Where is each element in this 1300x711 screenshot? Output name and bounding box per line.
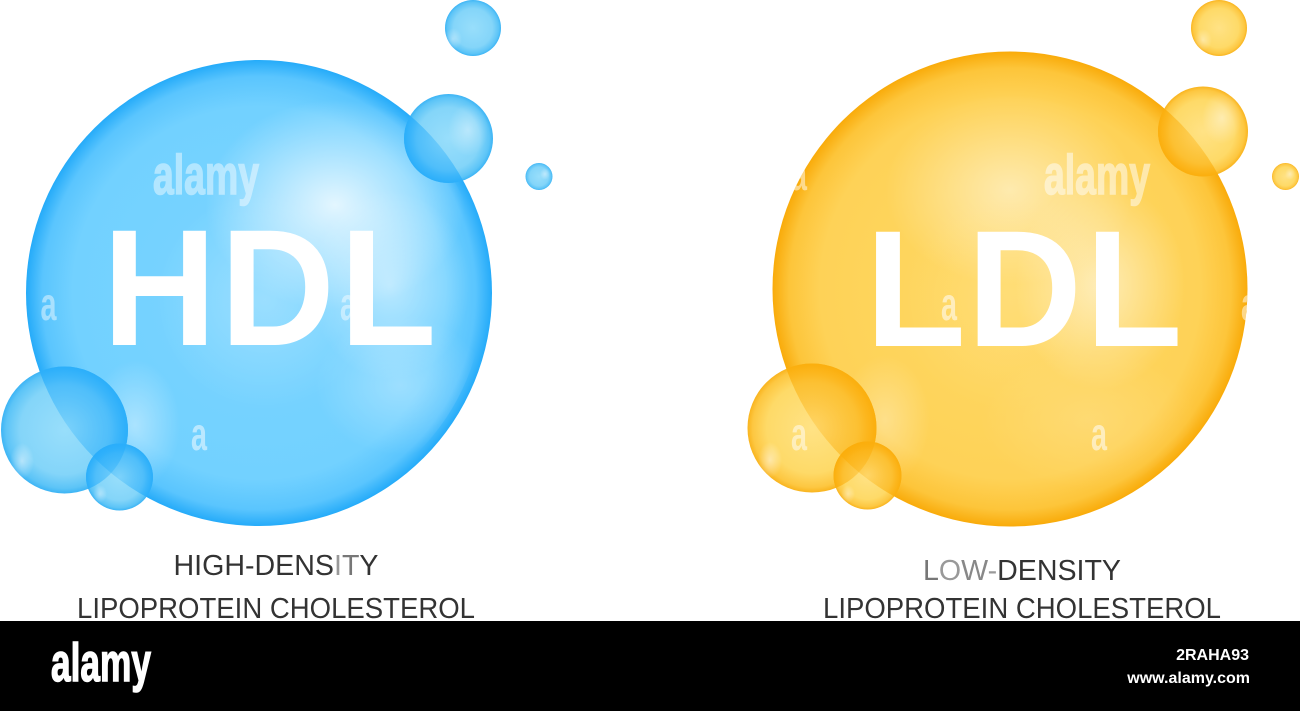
HDL label: D — [220, 196, 335, 381]
icon: blue small bubble lower left — [86, 444, 153, 510]
icon: orange bubble overlapping upper right — [1158, 86, 1248, 176]
watermark: clipped letter a at sphere edges: a — [1241, 278, 1257, 330]
icon: orange bubble lower left — [748, 364, 876, 492]
LDL description: LIPOPROTEIN CHOLESTEROL — [823, 593, 1221, 625]
panel: HDL — [1, 0, 552, 625]
HDL description: HIGH-DENSITY — [174, 550, 378, 582]
LDL label: D — [967, 197, 1082, 382]
icon: large orange LDL sphere — [772, 52, 1248, 526]
watermark: letter a left: a — [941, 278, 957, 330]
LDL label: L — [865, 197, 966, 382]
icon: blue bubble overlapping upper right — [404, 94, 493, 183]
HDL label — [102, 196, 436, 381]
watermark: letter a middle: a — [340, 278, 356, 330]
LDL label — [865, 197, 1182, 382]
watermark: alamy on LDL: alamy — [1044, 143, 1150, 206]
icon: large blue HDL sphere — [26, 60, 492, 526]
HDL description — [77, 550, 475, 625]
footer bar — [0, 621, 1300, 711]
HDL label: L — [340, 196, 436, 381]
footer site address: www.alamy.com — [1126, 670, 1250, 687]
footer logo: alamy: alamy — [51, 633, 151, 693]
HDL description: LIPOPROTEIN CHOLESTEROL — [77, 593, 475, 625]
LDL description: LOW-DENSITY — [923, 555, 1121, 587]
watermark: letter a lower left: a — [791, 408, 807, 460]
watermark: clipped letter a at sphere edges — [791, 148, 1257, 330]
icon: small blue bubble right — [526, 163, 552, 190]
HDL label: H — [102, 196, 216, 381]
watermark: letter a bottom: a — [191, 408, 207, 460]
icon: blue bubble top — [444, 0, 501, 56]
watermark: clipped letter a at sphere edges: a — [791, 148, 807, 200]
footer image ID: 2RAHA93 — [1176, 647, 1249, 664]
icon: small orange bubble right — [1272, 163, 1299, 190]
panel: LDL — [748, 0, 1299, 625]
icon: blue bubble lower left — [1, 366, 128, 494]
watermark: letter a left: a — [40, 278, 57, 330]
icon: orange bubble top — [1191, 0, 1247, 56]
watermark: letter a lower right: a — [1091, 408, 1107, 460]
watermark: alamy on HDL: alamy — [153, 143, 259, 206]
icon: orange small bubble lower left — [834, 442, 902, 510]
LDL label: L — [1085, 197, 1182, 382]
LDL description — [823, 555, 1221, 625]
